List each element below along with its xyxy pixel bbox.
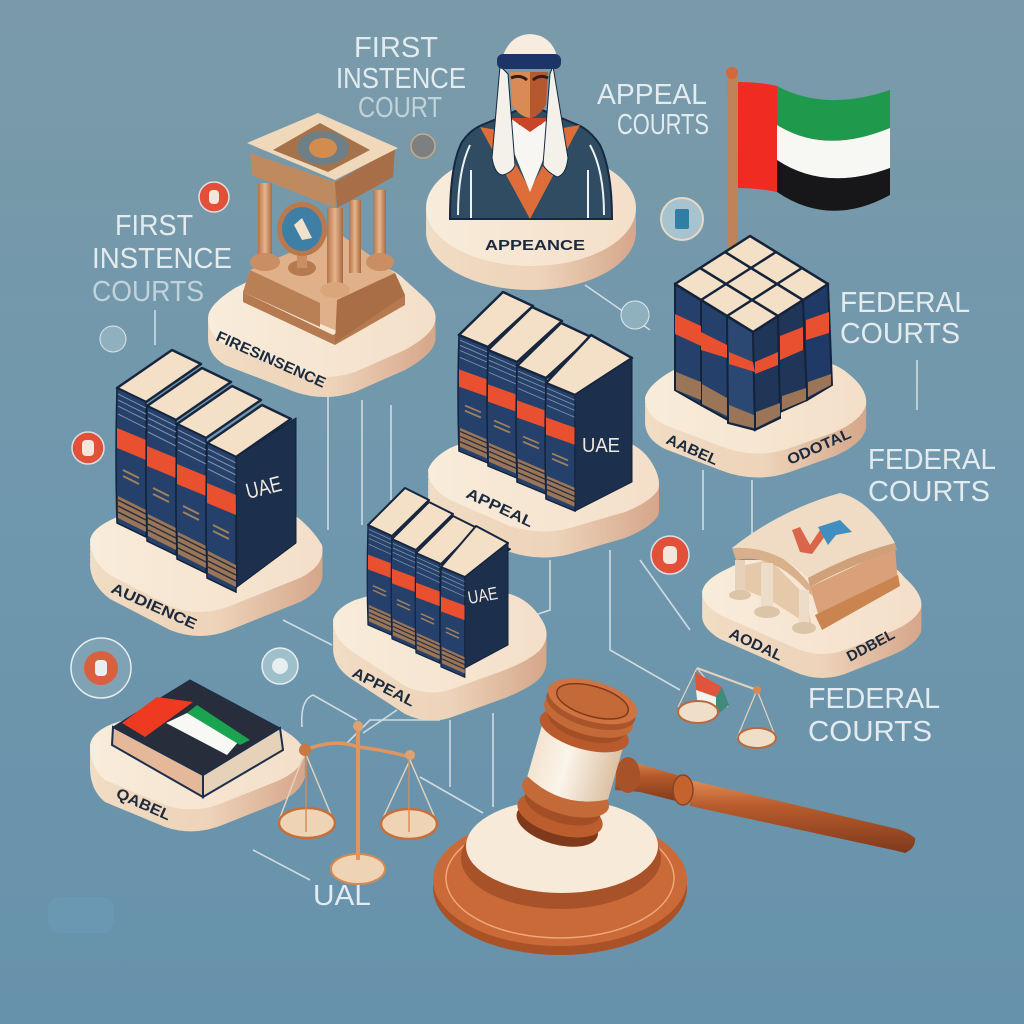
icon: small courthouse (729, 493, 900, 634)
heading: first instance court: COURT (358, 92, 442, 124)
icon: small balance scale (678, 668, 776, 748)
faint patch (48, 897, 114, 933)
icon: gavel (433, 669, 915, 955)
heading: first instance court: FIRST (354, 32, 438, 64)
platform label: aabel: AABEL (663, 431, 721, 469)
panel: appeal middle platform (428, 440, 659, 558)
heading: appeal courts (597, 79, 709, 141)
connector lines (155, 285, 917, 880)
heading: federal courts bottom: COURTS (808, 716, 932, 748)
heading: federal courts bottom (808, 683, 940, 748)
platform label: odotal: ODOTAL (785, 425, 854, 469)
panel: federal top platform (645, 362, 866, 478)
platform label: audience: AUDIENCE (108, 580, 199, 633)
platform label: first instance: FIRESINSENCE (213, 328, 328, 392)
heading: federal courts top: FEDERAL (840, 287, 970, 319)
panel: right platform (702, 560, 921, 678)
icon: book stack small (367, 488, 510, 677)
platform label: qabel: QABEL (113, 785, 173, 824)
book label: uae: UAE (243, 471, 284, 504)
heading: federal courts middle: FEDERAL (868, 444, 996, 476)
label: ual: UAL (313, 880, 371, 912)
icon: balance scale centre (279, 721, 437, 884)
book label: uae: UAE (466, 583, 499, 608)
heading: first instance courts (92, 210, 232, 308)
icon: flag book (112, 680, 283, 797)
icon: book stack federal (675, 236, 832, 430)
icon: round badges (71, 134, 703, 698)
book label: uae: UAE (582, 435, 620, 457)
panel: book platform bottom left (90, 718, 305, 831)
icon: book stack middle (458, 292, 632, 511)
icon: uae flag (726, 67, 890, 250)
heading: first instance courts: FIRST (115, 210, 193, 242)
platform label: aodal: AODAL (726, 625, 785, 665)
heading: appeal courts: COURTS (617, 109, 709, 141)
platform label: appeal: APPEAL (349, 664, 417, 710)
heading: federal courts top: COURTS (840, 318, 960, 350)
heading: federal courts bottom: FEDERAL (808, 683, 940, 715)
panel: first instance platform (208, 268, 436, 397)
heading: federal courts top (840, 287, 970, 350)
icon: judge figure (450, 34, 612, 219)
panel: lower appeal platform (333, 594, 547, 721)
platform label: ddbel: DDBEL (844, 626, 898, 666)
heading: first instance courts: COURTS (92, 276, 204, 308)
panel: left platform (90, 512, 323, 636)
platform label: appeal: APPEAL (463, 485, 536, 531)
heading: federal courts middle: COURTS (868, 476, 990, 508)
heading: appeal courts: APPEAL (597, 79, 707, 111)
heading: first instance courts: INSTENCE (92, 243, 232, 275)
icon: courthouse pavilion (243, 113, 405, 345)
icon: book stack left (116, 350, 296, 592)
heading: first instance court: INSTENCE (336, 63, 466, 95)
heading: federal courts middle (868, 444, 996, 508)
platform label: appearance: APPEANCE (485, 237, 585, 254)
panel: appeal top platform (426, 150, 636, 290)
heading: first instance court (336, 32, 466, 124)
